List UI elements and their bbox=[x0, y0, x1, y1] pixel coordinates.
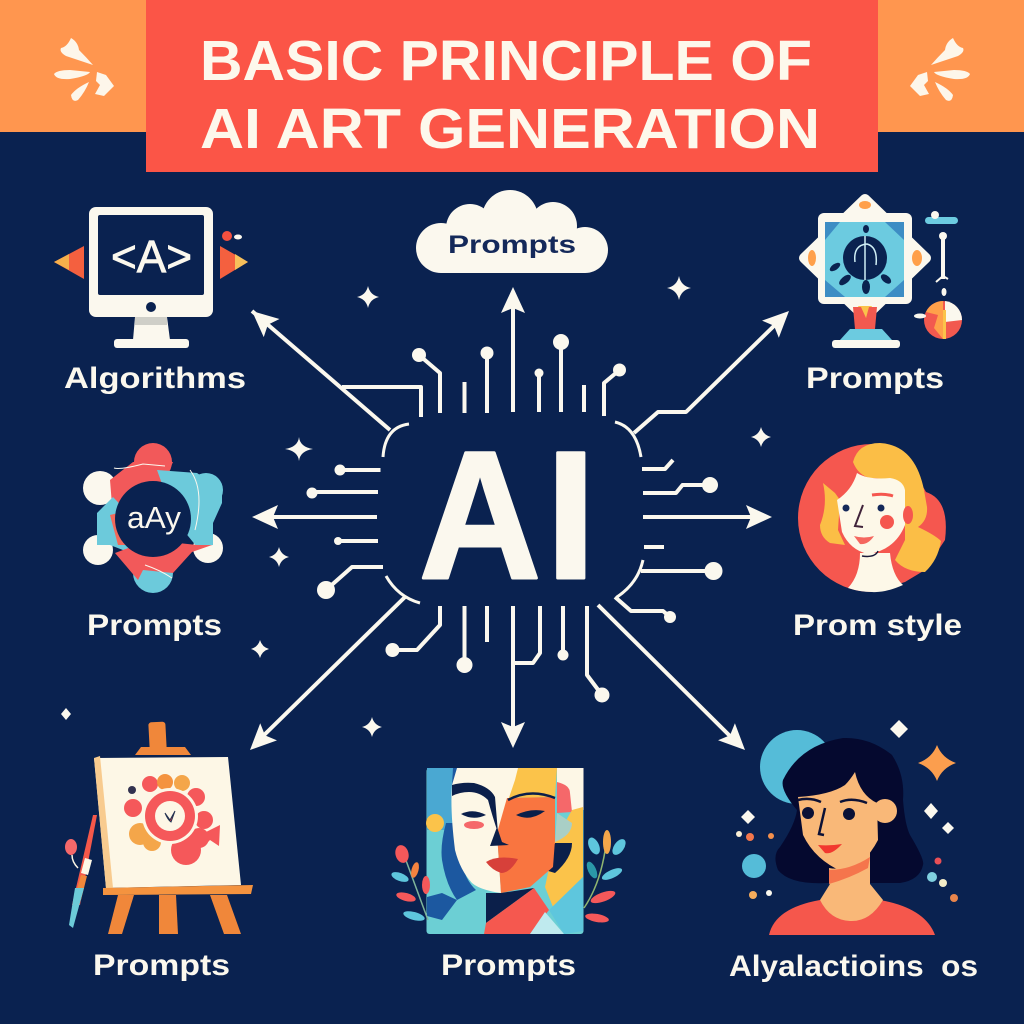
label: Prompts painting: Prompts bbox=[441, 949, 576, 982]
label: Prompts right: Prompts bbox=[806, 362, 944, 395]
title banner bbox=[146, 0, 878, 172]
icon: ornate mirror dial bbox=[804, 199, 962, 348]
icon: easel with canvas and brush bbox=[65, 722, 253, 934]
title banner: BASIC PRINCIPLE OF bbox=[200, 29, 812, 93]
arrowheads bbox=[242, 287, 797, 759]
circuit traces bbox=[252, 300, 780, 741]
icon: abstract face painting bbox=[390, 768, 628, 934]
AI label: A bbox=[419, 413, 541, 617]
icon: monitor algorithms: <A> bbox=[111, 231, 192, 282]
cloud: Prompts: Prompts bbox=[448, 231, 576, 259]
icon: abstract flower aAy bbox=[83, 443, 223, 593]
icon: right burst bbox=[910, 38, 970, 101]
icon: blonde woman portrait bbox=[798, 443, 946, 592]
decorative stars bbox=[61, 276, 771, 737]
cloud: Prompts bbox=[416, 190, 608, 273]
central AI chip circuit diagram bbox=[242, 287, 797, 759]
icon: monitor algorithms bbox=[54, 207, 248, 348]
title banner: AI ART GENERATION bbox=[200, 97, 820, 161]
AI label: I bbox=[546, 413, 596, 617]
label: Prompts easel: Prompts bbox=[93, 949, 230, 982]
icon: abstract flower aAy: aAy bbox=[127, 500, 182, 535]
label: Prom style: Prom style bbox=[793, 609, 962, 642]
label: Alyalactioins os: Alyalactioins os bbox=[729, 950, 978, 983]
label: Algorithms: Algorithms bbox=[64, 362, 246, 395]
header band bbox=[0, 0, 1024, 132]
circuit nodes bbox=[306, 334, 722, 702]
label: Prompts left: Prompts bbox=[87, 609, 222, 642]
icon: left burst bbox=[54, 38, 114, 101]
icon: dark haired woman avatar bbox=[736, 720, 958, 935]
